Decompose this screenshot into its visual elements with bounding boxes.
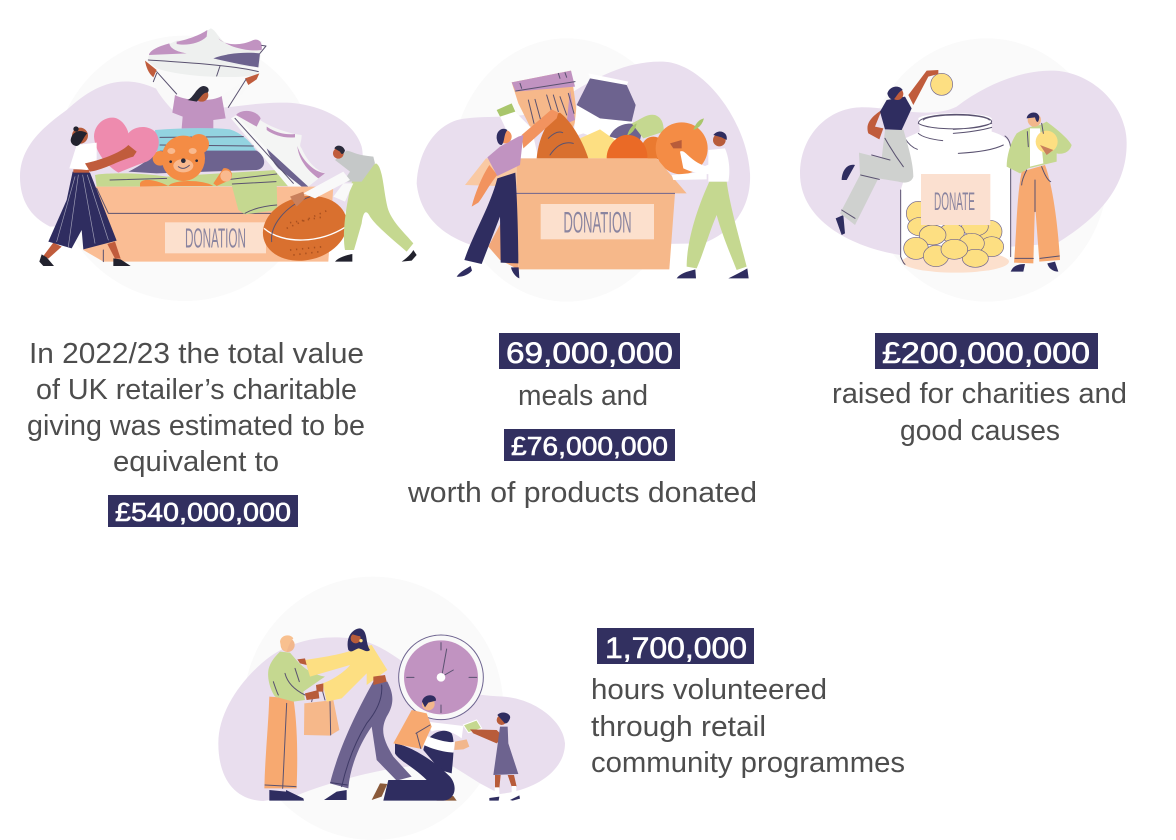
- donation box: DONATION: [185, 223, 246, 254]
- jar label: DONATE: [934, 189, 975, 216]
- text: worth of products donated: worth of products donated: [407, 477, 757, 509]
- icon: clock: [399, 635, 483, 720]
- panel: total charitable giving: [20, 28, 417, 527]
- illustration: volunteers and clock: [218, 577, 565, 840]
- text: raised for charities and good causes: [832, 378, 1127, 447]
- icon: banknotes: [463, 720, 482, 733]
- coins: [904, 201, 1004, 267]
- icon: sneaker held overhead: [148, 28, 266, 77]
- text: hours volunteered description: [591, 674, 905, 779]
- figure: kneeling man: [372, 695, 469, 801]
- text: hours volunteered description: through retail: [591, 711, 766, 743]
- illustration: coin donation jar: [800, 38, 1127, 302]
- badge: £200,000,000: £200,000,000: [882, 337, 1090, 370]
- figure: woman with heart: [39, 126, 137, 266]
- figure: woman in yellow: [297, 628, 412, 800]
- badge: £540,000,000: £540,000,000: [115, 497, 291, 527]
- donation box: DONATION: [563, 207, 632, 240]
- text: raised for charities and good causes: raised for charities and: [832, 378, 1127, 410]
- donation box: [83, 182, 333, 262]
- text: total value description: equivalent to: [113, 446, 279, 478]
- icon: rugby ball: [256, 187, 354, 269]
- badge: £76,000,000: £76,000,000: [511, 431, 668, 461]
- text: hours volunteered description: community programmes: [591, 747, 905, 779]
- text: total value description: of UK retailer’s charitable: [36, 374, 357, 406]
- icon: sneaker in box: [231, 111, 325, 187]
- figure: person lifting sneaker: [145, 61, 259, 128]
- illustration: food donation box: [417, 38, 750, 302]
- figure: woman dropping coin: [836, 70, 938, 235]
- text: total value description: In 2022/23 the total value: [29, 338, 364, 370]
- jar label: [921, 174, 990, 225]
- figure: man with orange: [670, 131, 749, 278]
- figure: man pushing ball: [290, 146, 417, 262]
- badge: 1,700,000: 1,700,000: [605, 632, 747, 665]
- panel: meals and products donated: [407, 38, 757, 509]
- icon: falling coin: [931, 73, 953, 95]
- food items: [497, 71, 708, 174]
- text: total value description: [27, 338, 365, 478]
- badge: 69,000,000: 69,000,000: [506, 337, 673, 370]
- text: raised for charities and good causes: good causes: [900, 415, 1060, 447]
- donation box: [465, 158, 687, 269]
- text: meals and: meals and: [518, 380, 648, 412]
- clothes stack: [95, 128, 288, 187]
- figure: older man with bag: [264, 635, 325, 801]
- icon: pink heart: [94, 118, 159, 173]
- figure: man holding coin: [1007, 113, 1072, 272]
- icon: shopping bag: [304, 690, 339, 736]
- jar: [901, 113, 1011, 273]
- text: hours volunteered description: hours volunteered: [591, 674, 827, 706]
- figure: child: [470, 713, 520, 801]
- illustration: donation box with clothes and toys: [20, 28, 417, 301]
- panel: raised for charities: [800, 38, 1127, 447]
- figure: woman reaching: [457, 109, 558, 278]
- panel: hours volunteered: [218, 577, 905, 840]
- text: total value description: giving was estimated to be: [27, 410, 365, 442]
- icon: teddy bear: [140, 134, 232, 187]
